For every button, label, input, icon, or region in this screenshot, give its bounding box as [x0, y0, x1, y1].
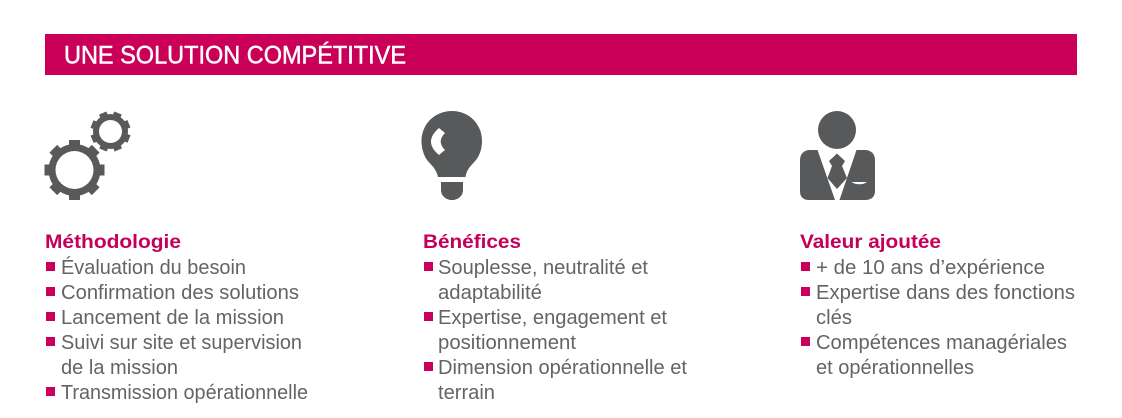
list: Bénéfices — [424, 257, 687, 404]
list: Bénéfices: positionnement — [438, 332, 576, 354]
list: Bénéfices: Expertise, engagement et — [438, 307, 667, 329]
list: Bénéfices: terrain — [438, 382, 495, 404]
list: Bénéfices: Dimension opérationnelle et — [438, 357, 687, 379]
heading: Méthodologie: Méthodologie — [45, 232, 181, 253]
heading: Bénéfices: Bénéfices — [423, 232, 521, 253]
icon: person in suit — [800, 111, 875, 200]
list: Valeur ajoutée: Expertise dans des fonctions — [816, 282, 1075, 304]
panel: Valeur ajoutée — [800, 111, 1075, 379]
list: Méthodologie: Évaluation du besoin — [61, 256, 246, 279]
list: Bénéfices: adaptabilité — [438, 282, 542, 304]
panel: Méthodologie — [44, 111, 308, 404]
list: Méthodologie: Confirmation des solutions — [61, 282, 299, 304]
list: Méthodologie: Suivi sur site et supervision — [61, 332, 302, 354]
list: Méthodologie: Transmission opérationnelle — [61, 382, 308, 404]
list: Méthodologie — [46, 256, 308, 404]
list: Valeur ajoutée — [801, 257, 1075, 379]
list: Valeur ajoutée: et opérationnelles — [816, 357, 974, 379]
icon: light bulb — [422, 111, 482, 200]
list: Valeur ajoutée: + de 10 ans d’expérience — [816, 257, 1045, 279]
title text: UNE SOLUTION COMPÉTITIVE — [64, 40, 406, 70]
title banner — [45, 34, 1077, 75]
heading: Valeur ajoutée: Valeur ajoutée — [800, 232, 941, 253]
list: Méthodologie: de la mission — [61, 357, 178, 379]
panel: Bénéfices — [422, 111, 687, 404]
icon: gears — [44, 111, 131, 200]
list: Valeur ajoutée: clés — [816, 307, 852, 329]
list: Bénéfices: Souplesse, neutralité et — [438, 257, 648, 279]
list: Méthodologie: Lancement de la mission — [61, 307, 284, 329]
list: Valeur ajoutée: Compétences managériales — [816, 332, 1067, 354]
